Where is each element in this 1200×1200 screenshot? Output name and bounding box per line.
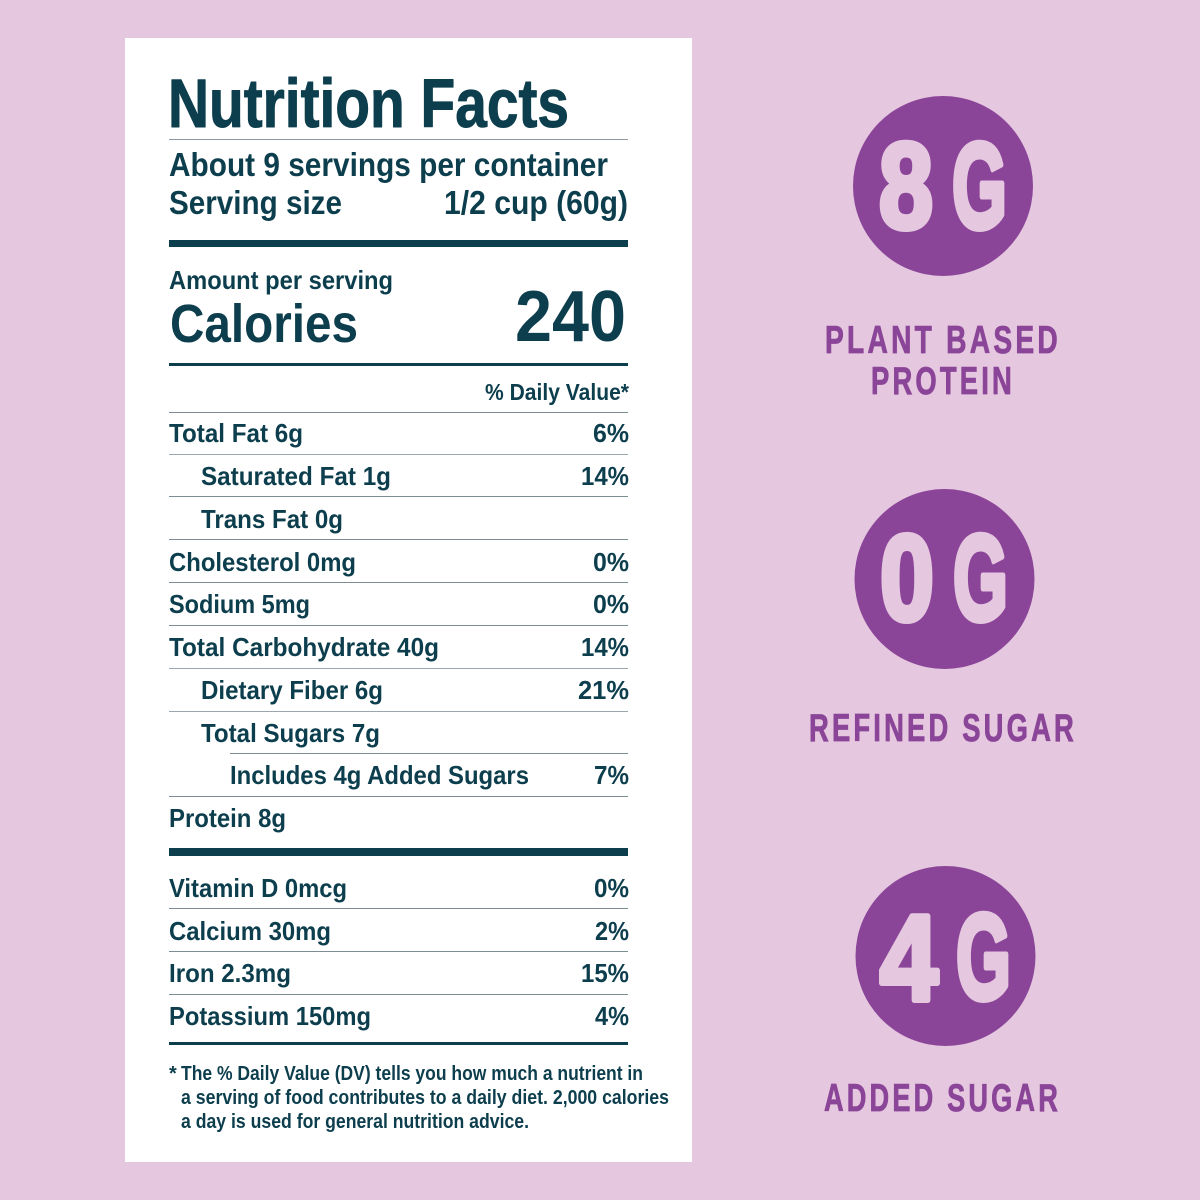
- badge: 8G: 8: [879, 118, 933, 254]
- row: added sugars: 7%: [594, 760, 629, 790]
- label: plant based protein: PLANT BASED: [825, 319, 1061, 362]
- footnote: *: [169, 1063, 177, 1085]
- row: calcium: [169, 916, 629, 946]
- row: sodium: Sodium 5mg: [169, 589, 310, 619]
- row: saturated fat: [201, 461, 629, 491]
- row: vitamin d: [169, 873, 629, 903]
- row: cholesterol: Cholesterol 0mg: [169, 547, 356, 577]
- row: total carbohydrate: Total Carbohydrate 40g: [169, 632, 439, 662]
- row: dietary fiber: 21%: [578, 675, 629, 705]
- row: total carbohydrate: [169, 632, 629, 662]
- row: saturated fat: Saturated Fat 1g: [201, 461, 391, 491]
- row: saturated fat: 14%: [581, 461, 629, 491]
- badge: 0G: G: [953, 510, 1008, 646]
- footnote: a day is used for general nutrition advice.: [181, 1111, 529, 1133]
- label: plant based protein: PROTEIN: [871, 360, 1015, 403]
- row: sodium: [169, 589, 629, 619]
- badge: 8G: [853, 96, 1033, 276]
- text: serving size: Serving size: [169, 184, 342, 221]
- number: 240 calories: 240: [515, 277, 626, 357]
- row: trans fat: Trans Fat 0g: [201, 504, 343, 534]
- text: serving size: [169, 184, 628, 221]
- row: sodium: 0%: [593, 589, 629, 619]
- badge: 4G: [856, 866, 1036, 1046]
- text: serving size: 1/2 cup (60g): [444, 184, 628, 221]
- badge: 4G: 4: [880, 890, 938, 1026]
- footnote: a serving of food contributes to a daily diet. 2,000 calories: [181, 1087, 669, 1109]
- row: dietary fiber: [201, 675, 629, 705]
- badge: 8G: G: [952, 118, 1007, 254]
- footnote: The % Daily Value (DV) tells you how much a nutrient in: [181, 1063, 643, 1085]
- row: cholesterol: 0%: [593, 547, 629, 577]
- row: iron: 15%: [581, 958, 629, 988]
- text: percent daily value header: % Daily Value*: [485, 379, 630, 405]
- row: total fat: 6%: [593, 418, 629, 448]
- text: amount per serving: Amount per serving: [169, 265, 393, 295]
- row: cholesterol: [169, 547, 629, 577]
- text: servings per container: About 9 servings per container: [169, 146, 608, 183]
- row: dietary fiber: Dietary Fiber 6g: [201, 675, 383, 705]
- row: calcium: Calcium 30mg: [169, 916, 331, 946]
- row: calcium: 2%: [595, 916, 629, 946]
- text: calories: Calories: [170, 294, 358, 354]
- row: protein: Protein 8g: [169, 803, 286, 833]
- label: added sugar: ADDED SUGAR: [824, 1077, 1061, 1120]
- row: iron: [169, 958, 629, 988]
- row: iron: Iron 2.3mg: [169, 958, 291, 988]
- panel: nutrition facts label: [125, 38, 692, 1162]
- heading: Nutrition Facts: Nutrition Facts: [168, 65, 569, 142]
- badge: 0G: 0: [880, 510, 934, 646]
- label: plant based protein: [825, 319, 1061, 403]
- row: total carbohydrate: 14%: [581, 632, 629, 662]
- row: total sugars: Total Sugars 7g: [201, 718, 380, 748]
- label: refined sugar: REFINED SUGAR: [809, 707, 1077, 750]
- row: vitamin d: 0%: [594, 873, 629, 903]
- row: vitamin d: Vitamin D 0mcg: [169, 873, 347, 903]
- row: potassium: 4%: [595, 1001, 629, 1031]
- badge: 4G: G: [956, 889, 1011, 1025]
- row: potassium: Potassium 150mg: [169, 1001, 371, 1031]
- footnote: [169, 1063, 669, 1133]
- row: total fat: [169, 418, 629, 448]
- badge: 0G: [854, 489, 1034, 669]
- row: added sugars: Includes 4g Added Sugars: [230, 760, 529, 790]
- row: potassium: [169, 1001, 629, 1031]
- row: total fat: Total Fat 6g: [169, 418, 303, 448]
